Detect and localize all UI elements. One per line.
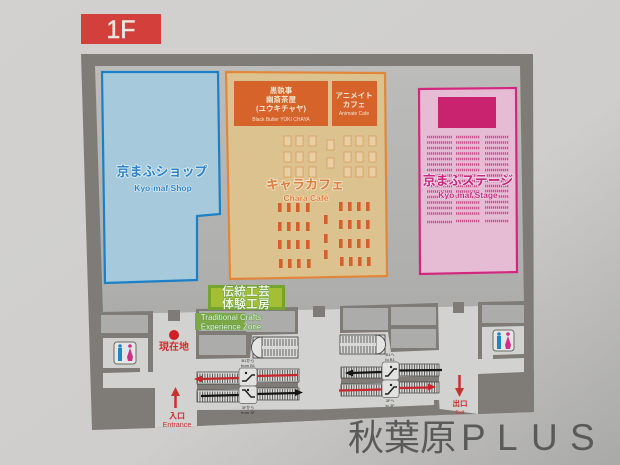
floor badge: 1F: 1F [106, 16, 136, 44]
icon: restrooms left [114, 342, 136, 364]
Animate Cafe booth [332, 81, 377, 126]
stage seating rows [427, 137, 509, 222]
arrow: entrance: 入口 [169, 412, 185, 420]
cafe label: Chara Café [284, 193, 329, 203]
floor badge: 1F [81, 14, 161, 44]
panel: Traditional Crafts Experience Zone: Experience Zone [201, 322, 262, 332]
icon: escalator to B1 [382, 362, 399, 380]
label: to B1: B1へ [386, 352, 394, 357]
label: to B1 [385, 352, 395, 362]
panel: Chara Cafe [226, 72, 387, 279]
panel: Kyo-maf Shop: 京まふショップ [116, 164, 208, 179]
arrow: exit: 出口 [452, 398, 468, 408]
panel: Traditional Crafts Experience Zone [195, 284, 285, 332]
stage label [423, 173, 513, 200]
watermark: Akihabara PLUS: 秋葉原 [348, 417, 456, 458]
panel: Traditional Crafts Experience Zone: 伝統工芸 [222, 284, 270, 298]
arrow: down from 3F [201, 389, 303, 396]
panel: Traditional Crafts Experience Zone: Traditional Crafts [201, 313, 261, 322]
Black Butler Yuki Chaya booth [234, 81, 328, 126]
Black Butler Yuki Chaya booth: 黒執事 [270, 85, 293, 95]
Black Butler Yuki Chaya booth: Black Butler YŪKI CHAYA [252, 116, 310, 123]
arrow: entrance: Entrance [163, 420, 191, 429]
cafe tables: upper [284, 136, 376, 177]
panel: Traditional Crafts Experience Zone: 体験工房 [222, 296, 270, 311]
Black Butler Yuki Chaya booth: (ユウキチャヤ) [256, 104, 306, 113]
label: from 3F [241, 404, 255, 415]
watermark: Akihabara PLUS: L [497, 417, 518, 458]
icon: escalator to 3F [382, 380, 399, 398]
stage platform [438, 97, 496, 128]
current location marker: 現在地 [159, 340, 189, 353]
icon: escalator 3F [239, 386, 257, 404]
stairs left [252, 337, 298, 358]
arrow: exit [452, 375, 468, 416]
cafe label: キャラカフェ [266, 177, 344, 192]
label: from 3F: 3Fから [242, 404, 254, 410]
arrow: entrance [163, 387, 191, 429]
panel: Kyo-maf Stage [419, 88, 517, 274]
stairs right [340, 335, 386, 354]
panel: Kyo-maf Shop: Kyo-maf Shop [134, 183, 192, 193]
Black Butler Yuki Chaya booth: 幽斎茶屋 [266, 94, 296, 104]
arrow: up to 3F [339, 384, 436, 390]
watermark: Akihabara PLUS: P [461, 417, 486, 458]
icon: restrooms right [493, 330, 514, 351]
rooms and walls [100, 301, 534, 426]
label: to 3F [385, 398, 395, 408]
floor plan: building shell [81, 54, 534, 430]
panel: Kyo-maf Shop [102, 72, 220, 283]
label: from B1: B1から [242, 357, 254, 363]
icon: escalator B1 [239, 368, 257, 386]
arrow: exit: Exit [455, 410, 465, 416]
label: to 3F: to 3F [385, 403, 395, 408]
label: from 3F: from 3F [241, 410, 255, 415]
label: from B1 [241, 357, 256, 368]
Animate Cafe booth: Animate Cafe [339, 111, 369, 117]
label: to B1: to B1 [385, 357, 395, 362]
cafe tables: lower [278, 202, 371, 268]
escalators left [194, 357, 303, 415]
escalators right [339, 352, 442, 408]
stage label: 京まふステージ [423, 173, 513, 188]
arrow: down to B1 [345, 370, 442, 376]
stage label: Kyo-maf Stage [438, 190, 498, 200]
current location marker [159, 330, 189, 353]
Animate Cafe booth: アニメイト [335, 91, 373, 100]
arrow: up from B1 [194, 375, 298, 382]
label: from B1: from B1 [241, 363, 256, 368]
watermark: Akihabara PLUS: U [531, 417, 558, 458]
watermark: Akihabara PLUS: S [570, 417, 595, 458]
Animate Cafe booth: カフェ [343, 100, 365, 109]
label: to 3F: 3Fへ [386, 398, 394, 403]
cafe label [266, 177, 344, 203]
